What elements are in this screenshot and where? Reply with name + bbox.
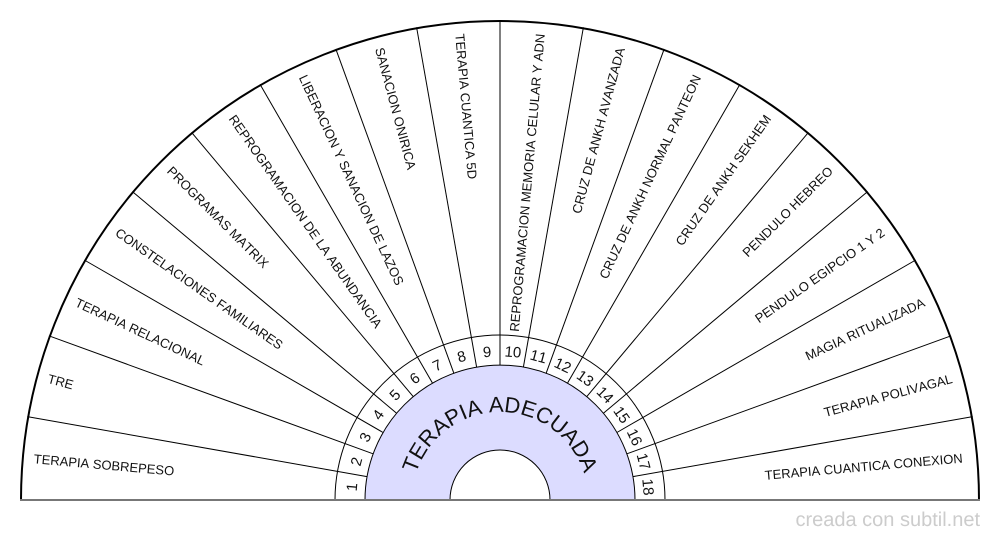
sector labels: REPROGRAMACION MEMORIA CELULAR Y ADN: [507, 33, 548, 332]
sector numbers: 11: [528, 347, 549, 367]
sector numbers: 16: [623, 426, 645, 449]
sector numbers: 12: [551, 355, 574, 377]
sector labels: PENDULO HEBREO: [739, 163, 836, 260]
sector numbers: 18: [638, 478, 657, 496]
sector labels: TERAPIA CUANTICA 5D: [452, 33, 480, 180]
center band: [365, 365, 635, 500]
sector labels: LIBERACION Y SANACION DE LAZOS: [296, 72, 407, 288]
title: TERAPIA ADECUADA: TERAPIA ADECUADA: [402, 396, 596, 474]
sector numbers: 3: [356, 430, 375, 445]
sector labels: CONSTELACIONES FAMILIARES: [113, 225, 286, 353]
sector numbers: 5: [386, 386, 404, 404]
sector numbers: 1: [344, 482, 361, 492]
sector labels: TERAPIA CUANTICA CONEXION: [764, 451, 963, 483]
sector numbers: 4: [369, 407, 388, 423]
sector labels: MAGIA RITUALIZADA: [803, 295, 927, 364]
sector numbers: 14: [593, 383, 617, 407]
sector numbers: 17: [633, 451, 653, 472]
sector labels: TERAPIA SOBREPESO: [33, 451, 175, 478]
sector labels: PENDULO EGIPCIO 1 Y 2: [752, 225, 887, 326]
sector labels: TERAPIA POLIVAGAL: [822, 371, 954, 420]
sector numbers: 7: [430, 356, 445, 375]
sector numbers: [344, 343, 657, 496]
sector numbers: 10: [504, 343, 522, 362]
baseline: [20, 499, 980, 501]
sector labels: TERAPIA RELACIONAL: [73, 295, 208, 368]
sector numbers: 2: [348, 455, 366, 468]
sector labels: CRUZ DE ANKH NORMAL PANTEON: [596, 72, 704, 281]
sector labels: [33, 33, 963, 483]
sector numbers: 9: [482, 344, 492, 361]
sector numbers: 13: [573, 367, 597, 391]
sector labels: CRUZ DE ANKH SEKHEM: [672, 112, 774, 248]
number ring: [335, 335, 665, 500]
watermark: creada con subtil.net: [795, 509, 980, 531]
sector numbers: 6: [407, 369, 423, 388]
sector numbers: 8: [455, 348, 468, 366]
sector labels: CRUZ DE ANKH AVANZADA: [569, 46, 628, 215]
sector labels: TRE: [46, 371, 75, 392]
sector labels: REPROGRAMACION DE LA ABUNDANCIA: [226, 112, 385, 331]
sector labels: SANACION ONIRICA: [372, 46, 419, 171]
sector numbers: 15: [609, 403, 633, 427]
sector labels: PROGRAMAS MATRIX: [164, 163, 272, 271]
